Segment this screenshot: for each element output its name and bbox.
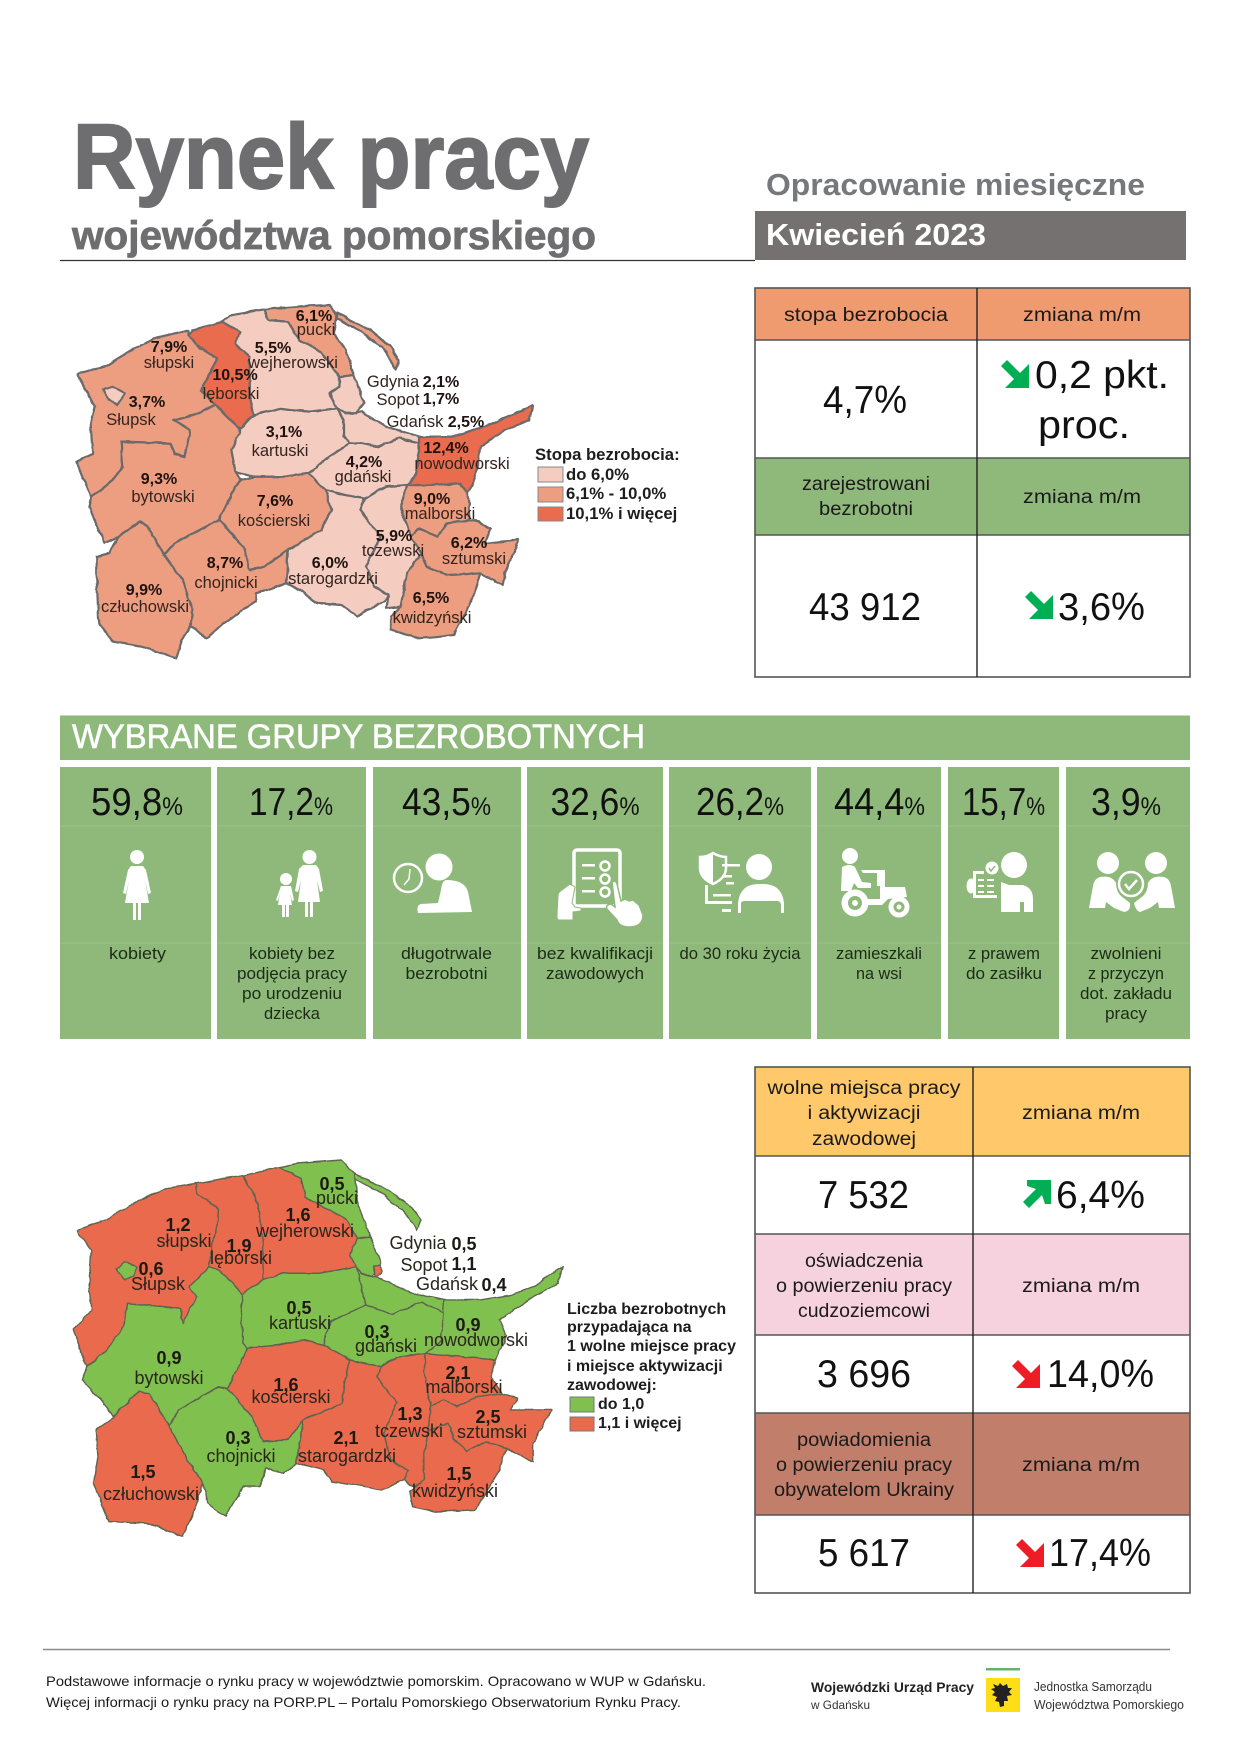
map labels: lęborski	[203, 385, 259, 403]
map labels: 12,4%	[423, 440, 469, 457]
city: Sopot	[372, 1265, 381, 1277]
header: zmiana m/m: zmiana m/m	[1023, 487, 1141, 508]
map regions	[76, 305, 533, 658]
map labels: 1,6	[285, 1205, 311, 1225]
date bar: Kwiecień 2023	[766, 217, 986, 252]
map labels: lęborski	[210, 1248, 272, 1268]
logo: Wojewódzki Urząd Pracy: Województwa Pomorskiego	[1034, 1697, 1184, 1712]
county: gdański	[323, 1302, 444, 1367]
county: chojnicki	[164, 520, 288, 638]
map labels: Słupsk	[106, 411, 157, 429]
header: zarejestrowani bezrobotni	[802, 474, 930, 520]
map labels: bytowski	[131, 488, 195, 506]
map labels: kartuski	[252, 442, 308, 460]
county: słupski	[76, 330, 217, 497]
map labels: kartuski	[269, 1313, 331, 1333]
value: unemployment rate: 4,7%	[823, 379, 907, 422]
map labels: 1,6	[273, 1375, 299, 1395]
icon: green down arrow	[1001, 360, 1029, 388]
banner: selected groups: WYBRANE GRUPY BEZROBOTNYCH	[72, 718, 645, 756]
map labels: człuchowski	[101, 598, 189, 616]
footer note: Podstawowe informacje o rynku pracy w województwie pomorskim. Opracowano w WUP w Gdańsku.	[46, 1673, 706, 1689]
map labels: 1,5	[446, 1464, 472, 1484]
map labels: sztumski	[457, 1422, 527, 1442]
map labels: Gdańsk	[416, 1274, 479, 1294]
panel: laid off	[1066, 767, 1190, 1039]
header: zarejestrowani bezrobotni: zarejestrowani	[802, 474, 930, 495]
Hel peninsula	[355, 1173, 422, 1230]
label	[237, 945, 348, 1023]
map labels: 7,9%	[151, 339, 187, 356]
map labels: 2,1	[333, 1428, 359, 1448]
label: dot. zakładu	[1080, 985, 1172, 1003]
map labels: Sopot	[400, 1255, 448, 1275]
label: podjęcia pracy	[237, 965, 348, 983]
map legend: do 1,0	[598, 1396, 644, 1413]
city: Gdynia	[350, 1237, 381, 1277]
label	[401, 945, 492, 983]
map labels: sztumski	[442, 550, 506, 568]
label	[1080, 945, 1172, 1023]
date bar	[755, 211, 1186, 260]
map labels: 2,5%	[448, 414, 484, 431]
map labels: nowodworski	[424, 1330, 528, 1350]
value: 26,2%	[696, 781, 784, 824]
map labels: 9,9%	[126, 582, 162, 599]
map legend: zawodowej:	[567, 1377, 657, 1394]
value: 15,7%	[962, 781, 1045, 824]
footer note: Więcej informacji o rynku pracy na PORP.PL – Portalu Pomorskiego Obserwatorium Rynku Pracy.	[46, 1694, 681, 1710]
label: zamieszkali	[836, 945, 922, 963]
city: Gdańsk	[357, 1267, 444, 1315]
label: kobiety	[109, 945, 167, 963]
label: zawodowych	[546, 965, 644, 983]
county: kwidzyński	[410, 1423, 506, 1512]
map labels: 1,3	[397, 1404, 423, 1424]
label: zwolnieni	[1090, 945, 1162, 963]
map legend: Stopa bezrobocia:	[535, 445, 680, 464]
icon: woman	[123, 850, 151, 920]
value: notifications change: 17,4%	[1049, 1532, 1151, 1575]
map labels: 9,3%	[141, 471, 177, 488]
city: Gdańsk	[337, 408, 419, 447]
map labels: gdański	[355, 1336, 417, 1356]
map legend: 1 wolne miejsce pracy	[567, 1338, 736, 1355]
map: unemployed per job offer by county	[73, 1160, 736, 1537]
panel: under 30	[669, 767, 811, 1039]
title: Rynek pracy	[73, 106, 589, 208]
county: chojnicki	[169, 1387, 303, 1517]
map labels: kwidzyński	[393, 609, 471, 627]
map labels: 6,2%	[451, 535, 487, 552]
value: declarations: 3 696	[817, 1353, 911, 1396]
logo: Wojewódzki Urząd Pracy: w Gdańsku	[810, 1698, 870, 1712]
county: sztumski	[411, 520, 519, 585]
value: job offers change: 6,4%	[1056, 1174, 1145, 1217]
icon: griffin crest	[986, 1678, 1020, 1712]
value: 32,6%	[550, 781, 640, 824]
county: kwidzyński	[390, 553, 480, 638]
county: kartuski	[231, 408, 350, 477]
banner: selected groups	[60, 716, 1190, 760]
map labels: 2,1	[445, 1363, 471, 1383]
panel: benefit entitled	[948, 767, 1059, 1039]
map regions	[73, 1160, 562, 1537]
icon: woman with child	[276, 850, 323, 917]
label: pracy	[1105, 1005, 1148, 1023]
map labels: 1,1	[451, 1254, 477, 1274]
Hel peninsula	[337, 313, 399, 370]
county: starogardzki	[297, 1360, 408, 1490]
map labels: gdański	[335, 468, 391, 486]
map labels: tczewski	[375, 1421, 443, 1441]
map labels: 1,7%	[423, 391, 459, 408]
header: stopa bezrobocia: stopa bezrobocia	[784, 305, 948, 326]
header: zmiana m/m: zmiana m/m	[1023, 305, 1141, 326]
icon: red down arrow	[1016, 1539, 1044, 1567]
county: starogardzki	[286, 490, 388, 617]
map labels: 1,5	[130, 1462, 156, 1482]
header: foreigners declarations: oświadczenia	[805, 1251, 923, 1272]
panel: no qualifications	[527, 767, 663, 1039]
map labels: 0,5	[451, 1234, 477, 1254]
map labels	[101, 308, 510, 627]
header: zmiana m/m: zmiana m/m	[1022, 1276, 1140, 1297]
map legend: do 6,0%	[566, 465, 629, 484]
county: kościerski	[219, 473, 331, 570]
map labels: Gdynia	[367, 373, 420, 391]
county: gdański	[309, 438, 419, 498]
city: Gdynia and Sopot	[329, 375, 364, 413]
value: 59,8%	[91, 781, 183, 824]
logo: Wojewódzki Urząd Pracy	[810, 1668, 1184, 1712]
label: po urodzeniu	[242, 985, 342, 1003]
value: rate change: 0,2 pkt.	[1035, 354, 1169, 397]
map labels: malborski	[405, 505, 475, 523]
icon: red down arrow	[1012, 1360, 1040, 1388]
map labels: 0,3	[225, 1428, 251, 1448]
header: Ukrainian notifications: o powierzeniu pracy	[776, 1455, 953, 1476]
map legend: przypadająca na	[567, 1319, 692, 1336]
footer note	[46, 1673, 706, 1710]
logo: Wojewódzki Urząd Pracy: Wojewódzki Urząd Pracy	[811, 1679, 974, 1695]
map labels: 1,2	[165, 1215, 191, 1235]
label: bezrobotni	[406, 965, 488, 983]
map labels: 0,5	[319, 1174, 345, 1194]
map legend: Liczba bezrobotnych	[567, 1301, 726, 1318]
county: sztumski	[428, 1393, 551, 1462]
value: 3,9%	[1091, 781, 1161, 824]
map labels: 5,5%	[255, 340, 291, 357]
icon: two people and check	[1089, 852, 1175, 912]
map legend: 1,1 i więcej	[598, 1415, 682, 1432]
label: na wsi	[856, 965, 902, 983]
header: title block	[60, 106, 1186, 260]
county: lęborski	[189, 322, 254, 428]
panel: women without work after childbirth	[217, 767, 366, 1039]
header: Ukrainian notifications	[774, 1430, 955, 1501]
label: dziecka	[264, 1005, 321, 1023]
map labels: 9,0%	[414, 491, 450, 508]
map labels: 3,1%	[266, 424, 302, 441]
map labels: 0,9	[156, 1348, 182, 1368]
map labels: słupski	[144, 354, 194, 372]
header: Ukrainian notifications: obywatelom Ukrainy	[774, 1480, 955, 1501]
county: bytowski	[89, 405, 242, 555]
header: foreigners declarations	[776, 1251, 953, 1322]
label	[966, 945, 1042, 983]
city: Słupsk	[103, 387, 125, 405]
label: do zasiłku	[966, 965, 1042, 983]
header: Ukrainian notifications: powiadomienia	[797, 1430, 931, 1451]
map labels: 10,5%	[212, 367, 258, 384]
map labels: 0,9	[455, 1315, 481, 1335]
county: kościerski	[227, 1340, 350, 1442]
map labels: wejherowski	[255, 1221, 354, 1241]
label	[836, 945, 922, 983]
map labels: 2,1%	[423, 374, 459, 391]
panel: women	[60, 767, 211, 1039]
value: notifications: 5 617	[818, 1532, 910, 1575]
county: tczewski	[377, 1353, 431, 1487]
icon: clock and person	[394, 854, 472, 913]
value: rate change: proc.	[1038, 404, 1130, 447]
map labels: 0,5	[286, 1298, 312, 1318]
map legend: 6,1% - 10,0%	[566, 484, 666, 503]
map labels: starogardzki	[288, 570, 378, 588]
county: tczewski	[360, 485, 421, 608]
map labels: pucki	[297, 321, 335, 339]
map legend: i miejsce aktywizacji	[567, 1358, 723, 1375]
county: lęborski	[196, 1175, 263, 1295]
county: nowodworski	[426, 1267, 562, 1360]
header: job offers: i aktywizacji	[808, 1103, 920, 1124]
map labels: Słupsk	[131, 1274, 186, 1294]
map labels: 8,7%	[207, 555, 243, 572]
county: bytowski	[82, 1267, 247, 1427]
monthly report label: Opracowanie miesięczne	[766, 167, 1145, 202]
map labels: 0,4	[481, 1275, 507, 1295]
subtitle: województwa pomorskiego	[71, 214, 596, 258]
value: rate change	[1035, 354, 1169, 447]
map labels: chojnicki	[194, 574, 258, 592]
map labels: kwidzyński	[412, 1481, 498, 1501]
icon: tablet and hands	[557, 850, 643, 927]
value: 44,4%	[834, 781, 925, 824]
county: słupski	[73, 1183, 218, 1367]
header: zarejestrowani bezrobotni: bezrobotni	[819, 499, 913, 520]
county: kartuski	[241, 1267, 366, 1348]
map labels: 7,6%	[257, 493, 293, 510]
label: bez kwalifikacji	[537, 945, 653, 963]
county: wejherowski	[223, 309, 339, 415]
map labels: 4,2%	[346, 454, 382, 471]
value: job offers: 7 532	[818, 1174, 909, 1217]
panel: long-term unemployed	[373, 767, 521, 1039]
county: pucki	[279, 1160, 370, 1238]
panel: unemployment table	[755, 288, 1190, 677]
county: wejherowski	[243, 1167, 357, 1280]
icon: shield, screen and person	[700, 853, 784, 913]
county: pucki	[264, 305, 354, 377]
label	[537, 945, 653, 983]
county: człuchowski	[97, 522, 193, 658]
icon: green down arrow	[1025, 591, 1053, 619]
map labels: kościerski	[251, 1387, 331, 1407]
panel: job offers table	[755, 1067, 1190, 1593]
map labels: 6,1%	[296, 308, 332, 325]
map: unemployment rate by county	[76, 305, 680, 658]
county: malborski	[424, 1353, 502, 1407]
label: do 30 roku życia	[680, 945, 801, 963]
value: declarations change: 14,0%	[1047, 1353, 1154, 1396]
header: foreigners declarations: cudzoziemcowi	[798, 1301, 930, 1322]
header: job offers	[766, 1078, 961, 1150]
map labels: nowodworski	[414, 455, 510, 473]
label: długotrwale	[401, 945, 492, 963]
map labels: słupski	[156, 1231, 212, 1251]
map labels: wejherowski	[247, 354, 338, 372]
map labels: kościerski	[238, 512, 310, 530]
map labels: człuchowski	[103, 1484, 199, 1504]
map labels: 6,0%	[312, 555, 348, 572]
value: 17,2%	[249, 781, 333, 824]
map labels: 6,5%	[413, 590, 449, 607]
icon: green up arrow	[1023, 1180, 1051, 1208]
header: job offers: wolne miejsca pracy	[766, 1078, 961, 1099]
label: z przyczyn	[1088, 965, 1164, 983]
header: foreigners declarations: o powierzeniu pracy	[776, 1276, 953, 1297]
value: registered change: 3,6%	[1058, 586, 1145, 629]
map labels: 5,9%	[376, 528, 412, 545]
map legend	[567, 1301, 736, 1432]
map labels: Gdynia	[389, 1233, 447, 1253]
county: człuchowski	[93, 1392, 203, 1537]
map labels: chojnicki	[206, 1446, 276, 1466]
map labels: Gdańsk	[387, 413, 444, 431]
header: job offers: zawodowej	[812, 1129, 916, 1150]
map labels	[103, 1174, 528, 1504]
value: 43,5%	[402, 781, 491, 824]
icon: clipboard and person	[966, 852, 1033, 912]
map labels: starogardzki	[298, 1446, 396, 1466]
map labels: 2,5	[475, 1407, 501, 1427]
map labels: 1,9	[226, 1236, 252, 1256]
label: kobiety bez	[249, 945, 335, 963]
map labels: tczewski	[362, 542, 424, 560]
map labels: bytowski	[134, 1368, 204, 1388]
map labels: pucki	[316, 1188, 358, 1208]
county: nowodworski	[407, 405, 533, 493]
county: malborski	[401, 483, 470, 537]
value: registered unemployed: 43 912	[809, 586, 921, 629]
label: z prawem	[968, 945, 1040, 963]
map labels: Sopot	[376, 391, 420, 409]
city: Słupsk	[116, 1262, 136, 1280]
header: zmiana m/m: zmiana m/m	[1022, 1455, 1140, 1476]
map labels: malborski	[425, 1377, 503, 1397]
map labels: 0,3	[364, 1322, 390, 1342]
map legend	[535, 445, 680, 523]
panel: rural residents	[817, 767, 941, 1039]
map legend: 10,1% i więcej	[566, 504, 677, 523]
icon: farmer on tractor	[841, 848, 910, 918]
logo: Wojewódzki Urząd Pracy: Jednostka Samorządu	[1034, 1679, 1152, 1694]
map labels: 0,6	[138, 1259, 164, 1279]
header: zmiana m/m: zmiana m/m	[1022, 1103, 1140, 1124]
map labels: 3,7%	[129, 394, 165, 411]
